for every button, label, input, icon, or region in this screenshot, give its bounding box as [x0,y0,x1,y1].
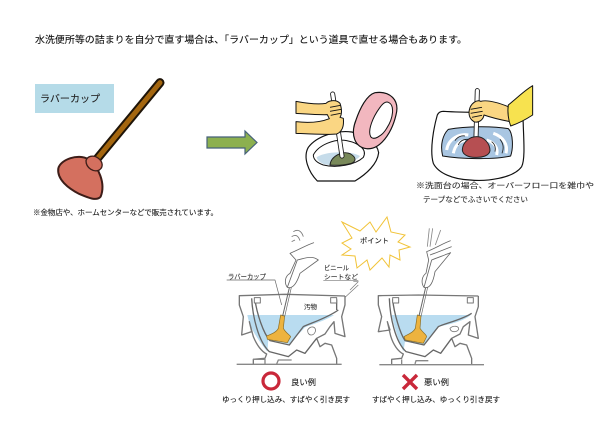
icon: plunger [58,83,160,199]
washbasin note: ※洗面台の場合、オーバーフロー口を雑巾や [416,181,594,190]
label: rubber cup: ラバーカップ [228,273,266,281]
bad example: cross mark and label: 悪い例 [424,377,449,387]
arrow [207,131,257,154]
icon: point starburst: ポイント [360,237,389,245]
rubber cup note: ※金物店や、ホームセンターなどで販売されています。 [33,208,218,217]
washbasin note: テープなどでふさいでください [423,195,528,204]
good example: circle mark and label: 良い例 [291,377,316,387]
good example: circle mark and label [263,373,316,389]
label: vinyl sheet: シートなど [324,273,359,281]
label: dirt: 汚物 [304,302,318,311]
illustration: bad example toilet [350,228,484,365]
label: vinyl sheet [324,263,359,281]
bad example: cross mark and label [403,375,449,389]
label: vinyl sheet: ビニール [324,263,349,272]
bad example description: すばやく押し込み、ゆっくり引き戻す [372,394,500,404]
icon: point starburst [342,217,410,270]
panel: rubber cup label [35,84,114,113]
illustration: toilet with plunger [296,92,397,181]
panel: rubber cup label: ラバーカップ [40,93,100,105]
illustration: good example toilet [227,230,358,365]
good example description: ゆっくり押し込み、すばやく引き戻す [222,394,350,404]
washbasin note [416,181,594,204]
illustration: washbasin with plunger [432,86,533,180]
title: 水洗便所等の詰まりを自分で直す場合は、「ラバーカップ」という道具で直せる場合もあります。 [35,33,467,46]
